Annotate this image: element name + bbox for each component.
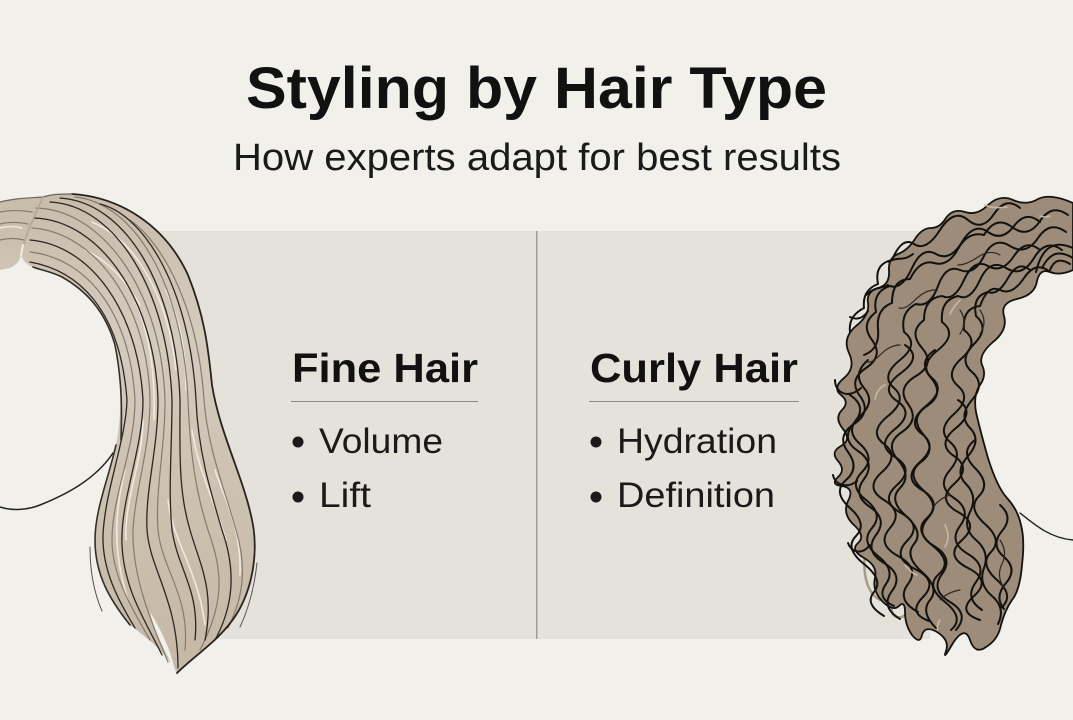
curl shading [866,252,1005,600]
list: curly hair benefits: Hydration [617,422,777,461]
center divider [536,231,538,639]
gray strands [0,197,242,662]
curl strands [840,203,1068,630]
subtitle: How experts adapt for best results [233,137,841,179]
list: curly hair benefits: Definition [617,476,775,515]
panel: curly hair text [589,345,799,515]
heading: Curly Hair: Curly Hair [590,345,798,391]
curl hooks [833,245,1073,552]
list: fine hair benefits: Lift [319,476,371,515]
panel: fine hair text [291,345,478,515]
list: fine hair benefits [292,422,443,515]
illustration: fine straight hair [0,194,257,673]
tip notch [150,612,175,670]
list: curly hair benefits [590,422,777,515]
illustration: curly hair [833,197,1073,655]
dark strands [30,198,231,668]
heading: Fine Hair: Fine Hair [292,345,478,391]
list: fine hair benefits: Volume [319,422,443,461]
panel: background panel [150,231,930,639]
title: Styling by Hair Type [246,56,827,121]
light strands [0,222,240,625]
